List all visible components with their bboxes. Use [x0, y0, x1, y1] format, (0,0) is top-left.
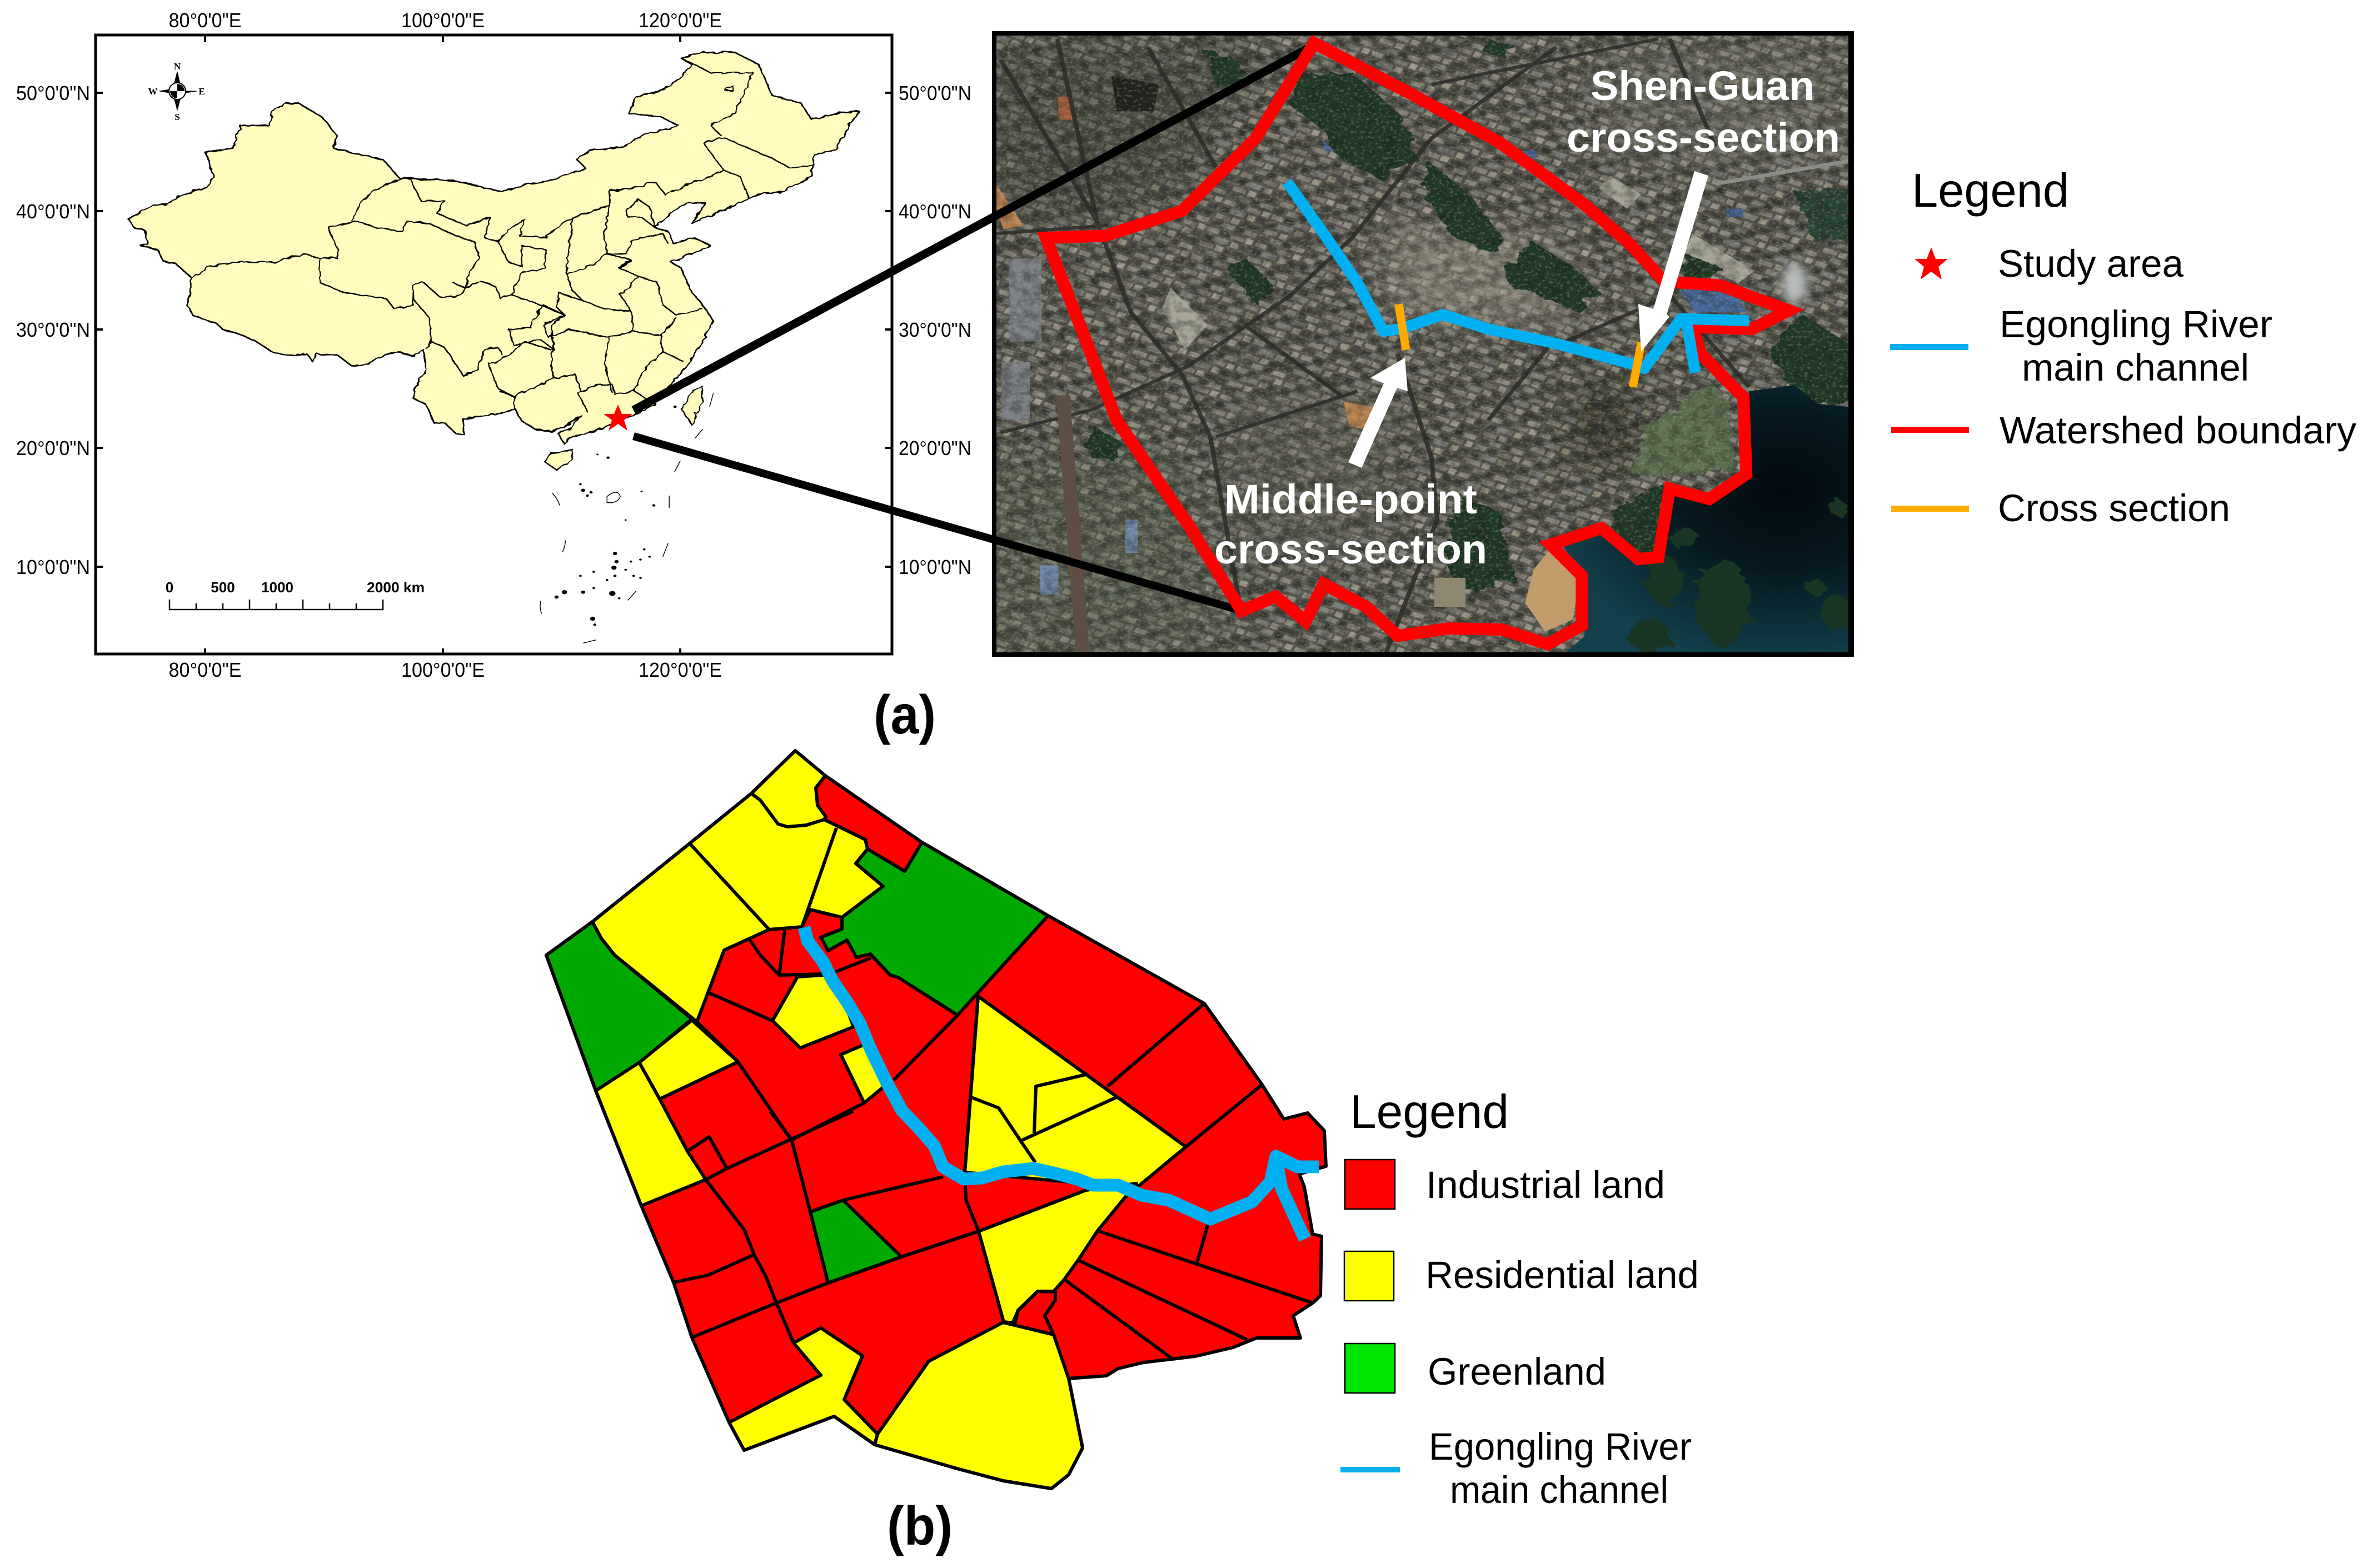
scale bar: 1000 — [261, 579, 293, 596]
icon: north arrow compass: N — [174, 61, 181, 72]
top longitude labels: 80°0'0"E — [169, 9, 241, 32]
arrow: Middle-point cross-section — [1348, 358, 1408, 468]
river main channel — [1287, 182, 1749, 373]
right latitude labels: 40°0'0"N — [899, 200, 971, 223]
icon: study area star — [604, 405, 632, 431]
legend item: study area — [1915, 242, 2184, 285]
scale bar — [166, 579, 425, 610]
legend item: industrial land: Industrial land — [1426, 1163, 1665, 1206]
legend heading: Legend — [1350, 1086, 1509, 1138]
panel: China location map — [16, 9, 971, 681]
bottom longitude labels: 100°0'0"E — [401, 658, 485, 681]
legend item: greenland — [1345, 1344, 1606, 1393]
cross sections — [1399, 304, 1641, 387]
caption (a): (a) — [874, 684, 936, 745]
top longitude labels: 100°0'0"E — [401, 9, 485, 32]
top longitude labels — [169, 9, 722, 32]
icon: north arrow compass — [148, 61, 205, 122]
panel: satellite image of watershed — [634, 22, 1897, 686]
label: Shen-Guan cross-section — [1567, 63, 1840, 161]
top longitude labels: 120°0'0"E — [639, 9, 722, 32]
right latitude labels: 50°0'0"N — [899, 82, 971, 104]
bottom longitude labels: 80°0'0"E — [169, 658, 241, 681]
callout line: lower connector — [634, 436, 1243, 611]
residential land parcels — [592, 751, 1186, 1489]
legend item: watershed boundary: Watershed boundary — [2000, 409, 2356, 452]
scale bar: 0 — [166, 579, 173, 596]
green land parcels — [546, 842, 1048, 1283]
panel: land use map — [546, 751, 1326, 1489]
icon: north arrow compass: S — [175, 112, 180, 122]
right latitude labels: 20°0'0"N — [899, 437, 971, 460]
legend item: study area: Study area — [1998, 242, 2184, 285]
left latitude labels — [16, 82, 90, 578]
industrial land base — [546, 751, 1326, 1489]
legend item: river: Egongling River — [2000, 303, 2272, 346]
legend item: river: Egongling River — [1429, 1425, 1692, 1468]
China provinces — [128, 52, 860, 470]
legend item: greenland: Greenland — [1428, 1350, 1606, 1393]
river on land use map — [804, 927, 1319, 1239]
right latitude labels — [899, 82, 971, 578]
axis ticks — [96, 35, 892, 654]
label: Middle-point cross-section — [1214, 476, 1487, 572]
legend item: river — [1890, 303, 2272, 389]
scale bar: 2000 km — [367, 579, 425, 596]
legend item: cross section: Cross section — [1998, 487, 2230, 530]
icon: north arrow compass: E — [198, 86, 205, 97]
map frame — [96, 35, 892, 654]
legend item: river: main channel — [2022, 346, 2249, 389]
watershed boundary — [1046, 43, 1789, 644]
left latitude labels: 10°0'0"N — [16, 556, 90, 578]
caption (b): (b) — [887, 1495, 953, 1556]
panel: land use legend — [1340, 1086, 1699, 1511]
label: Shen-Guan cross-section: Shen-Guan — [1591, 63, 1814, 109]
label: Shen-Guan cross-section: cross-section — [1567, 114, 1840, 161]
legend item: industrial land — [1345, 1160, 1665, 1209]
arrow: Shen-Guan cross-section — [1638, 171, 1708, 352]
label: Middle-point cross-section: Middle-point — [1224, 476, 1477, 522]
bottom longitude labels: 120°0'0"E — [639, 658, 722, 681]
legend item: residential land: Residential land — [1425, 1254, 1699, 1296]
legend heading: Legend — [1912, 164, 2069, 217]
right latitude labels: 30°0'0"N — [899, 318, 971, 341]
right latitude labels: 10°0'0"N — [899, 556, 971, 578]
left latitude labels: 30°0'0"N — [16, 318, 90, 341]
left latitude labels: 40°0'0"N — [16, 200, 90, 223]
satellite imagery — [996, 36, 1848, 652]
bottom longitude labels — [169, 658, 722, 681]
legend item: cross section — [1891, 487, 2230, 530]
left latitude labels: 50°0'0"N — [16, 82, 90, 104]
left latitude labels: 20°0'0"N — [16, 437, 90, 460]
parcel boundary lines — [674, 793, 1313, 1359]
South China Sea islands — [540, 393, 714, 643]
legend item: river: main channel — [1450, 1469, 1668, 1511]
legend item: river — [1340, 1425, 1692, 1511]
icon: north arrow compass: W — [148, 86, 158, 97]
scale bar: 500 — [211, 579, 235, 596]
callout line: upper connector — [634, 45, 1314, 410]
satellite frame — [992, 31, 1854, 657]
panel: legend for satellite map — [1890, 164, 2356, 530]
label: Middle-point cross-section: cross-section — [1214, 526, 1487, 572]
legend item: residential land — [1344, 1251, 1699, 1301]
